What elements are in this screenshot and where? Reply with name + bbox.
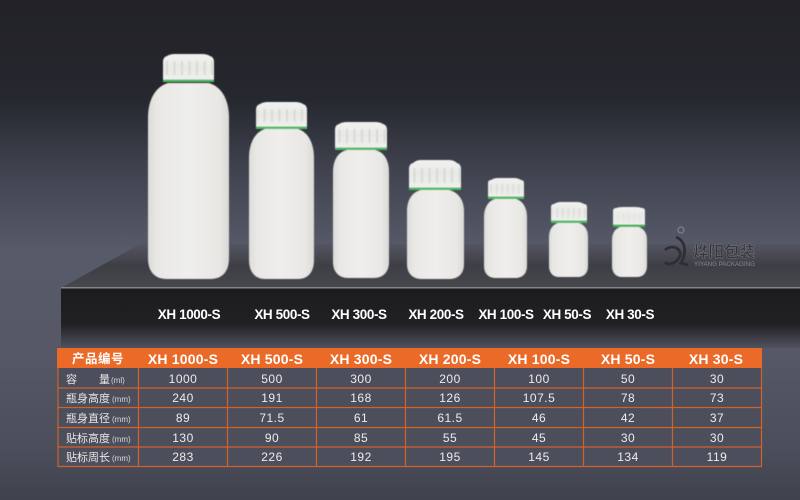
product names row: XH 300-S [331,307,387,322]
row: bottle height: 78 [621,391,635,405]
row: label height: 45 [532,431,546,445]
row: capacity: 30 [710,372,724,386]
row: label height: 贴标高度 [66,431,110,445]
row: bottle height: 240 [172,391,194,405]
row: bottle height [66,391,724,405]
product names row: XH 50-S [543,307,591,322]
logo watermark [665,227,756,268]
row: label circumference: 119 [707,450,727,464]
row: label circumference: 134 [617,450,639,464]
row: bottle diameter: 42 [621,411,635,425]
row: bottle diameter: 89 [176,411,190,425]
product names row: XH 500-S [254,307,310,322]
bottle: XH 50-S [549,202,588,277]
row: capacity [66,372,724,386]
row: label height: (mm) [112,435,131,444]
row: bottle diameter: 瓶身直径 [66,411,110,425]
table header: XH 1000-S [148,351,218,367]
row: bottle height: 168 [350,391,372,405]
row: bottle diameter: (mm) [112,415,131,424]
bottle: XH 500-S [249,102,314,279]
row: bottle diameter: 37 [710,411,724,425]
row: label circumference [66,450,727,464]
table header [57,348,762,368]
row: capacity: 容 [66,372,77,386]
row: capacity: 200 [439,372,461,386]
bottle: XH 200-S [407,160,464,279]
row: bottle height: 126 [439,391,461,405]
row: label height: 30 [710,431,724,445]
row: bottle diameter: 46 [532,411,546,425]
row: label circumference: 283 [172,450,194,464]
table header: XH 500-S [241,351,303,367]
specification table [57,348,762,467]
row: label circumference: (mm) [112,454,131,463]
bottle: XH 300-S [333,122,389,278]
table header: XH 30-S [689,351,743,367]
table header: XH 50-S [601,351,655,367]
row: label height: 90 [265,431,279,445]
row: bottle height: 107.5 [523,391,555,405]
row: bottle diameter: 61.5 [437,411,463,425]
table header: XH 100-S [508,351,570,367]
row: bottle height: 191 [261,391,283,405]
table header: 产品编号 [72,351,124,366]
row: label circumference: 145 [528,450,550,464]
platform [61,244,800,348]
row: bottle height: (mm) [112,395,131,404]
logo watermark: YIYANG PACKAGING [694,261,755,268]
row: label height: 55 [443,431,457,445]
row: bottle diameter: 71.5 [259,411,285,425]
row: capacity: 1000 [169,372,197,386]
row: label height: 30 [621,431,635,445]
row: label circumference: 192 [350,450,372,464]
row: bottle diameter: 61 [354,411,368,425]
row: bottle diameter [66,411,724,425]
logo watermark: 烨阳包装 [693,242,756,261]
table body [58,348,762,466]
row: label circumference: 贴标周长 [66,450,110,464]
product names row: XH 1000-S [158,307,221,322]
bottle: XH 1000-S [148,54,229,279]
row: capacity: 300 [350,372,372,386]
row: capacity: 量 [99,373,110,386]
row: capacity: 100 [528,372,550,386]
row: capacity: 500 [261,372,283,386]
row: label circumference: 226 [261,450,283,464]
row: bottle height: 瓶身高度 [66,391,110,405]
product names row: XH 200-S [408,307,464,322]
row: label height: 85 [354,431,368,445]
row: bottle height: 73 [710,391,724,405]
row: capacity: (ml) [111,376,125,385]
product names row: XH 30-S [606,307,654,322]
row: label height: 130 [172,431,194,445]
product names row: XH 100-S [478,307,534,322]
table header: XH 200-S [419,351,481,367]
row: label height [66,431,724,445]
row: capacity: 50 [621,372,635,386]
bottle: XH 30-S [612,207,647,277]
bottle: XH 100-S [484,178,527,278]
table header: XH 300-S [330,351,392,367]
row: label circumference: 195 [439,450,461,464]
product names row [158,307,654,322]
